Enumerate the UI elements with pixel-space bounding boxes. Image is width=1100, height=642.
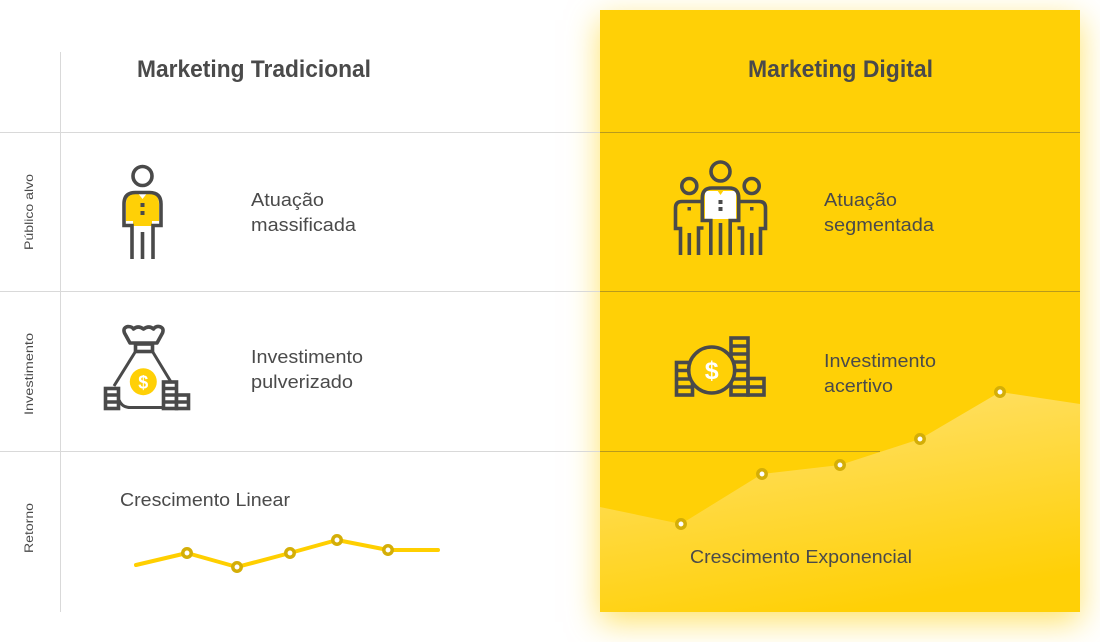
heading: marketing tradicional: Marketing Tradicional bbox=[137, 56, 371, 83]
text: crescimento exponencial: Crescimento Exponencial bbox=[690, 547, 912, 567]
icon: money bag bbox=[106, 326, 188, 408]
row label: investimento: Investimento bbox=[22, 333, 36, 415]
row label: retorno: Retorno bbox=[22, 503, 36, 553]
chart: linear growth bbox=[136, 536, 438, 571]
icon: money bag: $ bbox=[138, 372, 148, 392]
chart: exponential area bbox=[600, 392, 1080, 612]
text: crescimento linear: Crescimento Linear bbox=[120, 490, 290, 510]
text: investimento acertivo: Investimento bbox=[824, 351, 936, 371]
icon: group of people bbox=[676, 162, 766, 255]
text: atuação massificada: massificada bbox=[251, 215, 357, 235]
chart points: exponential bbox=[677, 388, 1004, 528]
icon: single person bbox=[124, 166, 161, 259]
row label: público alvo: Público alvo bbox=[22, 174, 36, 250]
text: atuação massificada: Atuação bbox=[251, 190, 324, 210]
panel: marketing digital background bbox=[600, 10, 1080, 612]
icon: coin stacks bbox=[676, 338, 764, 395]
text: atuação segmentada: segmentada bbox=[824, 215, 935, 235]
text: atuação segmentada: Atuação bbox=[824, 190, 897, 210]
icon: coin stacks: $ bbox=[705, 357, 719, 385]
text: investimento pulverizado: Investimento bbox=[251, 347, 363, 367]
text: investimento pulverizado: pulverizado bbox=[251, 372, 353, 392]
text: investimento acertivo: acertivo bbox=[824, 376, 893, 396]
heading: marketing digital: Marketing Digital bbox=[748, 56, 933, 83]
